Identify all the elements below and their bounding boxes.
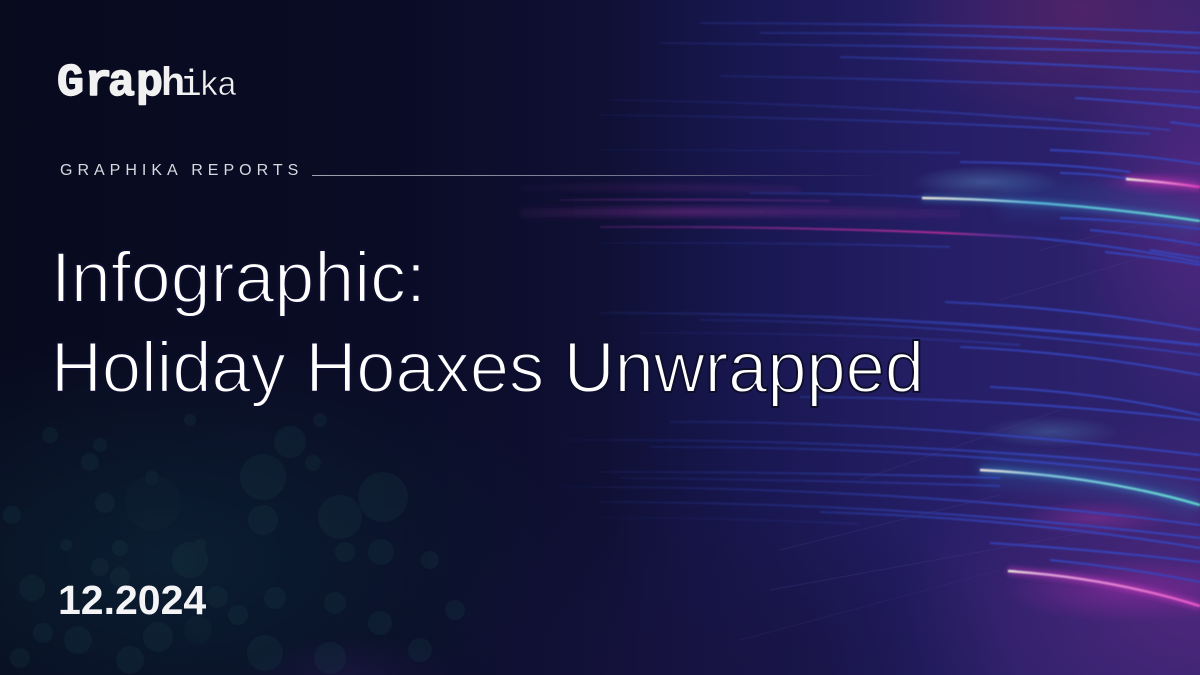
bright streak 2 xyxy=(980,470,1200,505)
logo: Graphika: a xyxy=(217,68,237,106)
logo: Graphika: p xyxy=(136,58,163,109)
logo: Graphika: G xyxy=(57,58,84,109)
logo: Graphika: h xyxy=(161,63,185,108)
logo: Graphika: a xyxy=(108,58,135,109)
logo: Graphika: r xyxy=(85,58,112,109)
magenta streak xyxy=(600,227,1035,238)
bright streak 1 xyxy=(922,198,1200,221)
logo: Graphika: k xyxy=(199,68,219,106)
bright streak 4 xyxy=(1126,179,1200,187)
decorative faint circle pattern, lower left xyxy=(3,413,465,674)
section label: GRAPHIKA REPORTS: GRAPHIKA REPORTS xyxy=(60,162,303,179)
blue streak lines xyxy=(500,23,1200,582)
title: Infographic: xyxy=(51,239,426,318)
logo: Graphika: i xyxy=(180,65,202,106)
date: 12.2024 xyxy=(58,577,206,623)
faint diagonal lines xyxy=(740,215,1200,640)
bright streak 3 xyxy=(1008,571,1200,606)
magenta haze bands xyxy=(520,212,960,214)
title: Holiday Hoaxes Unwrapped xyxy=(51,329,924,408)
divider rule xyxy=(312,175,882,176)
